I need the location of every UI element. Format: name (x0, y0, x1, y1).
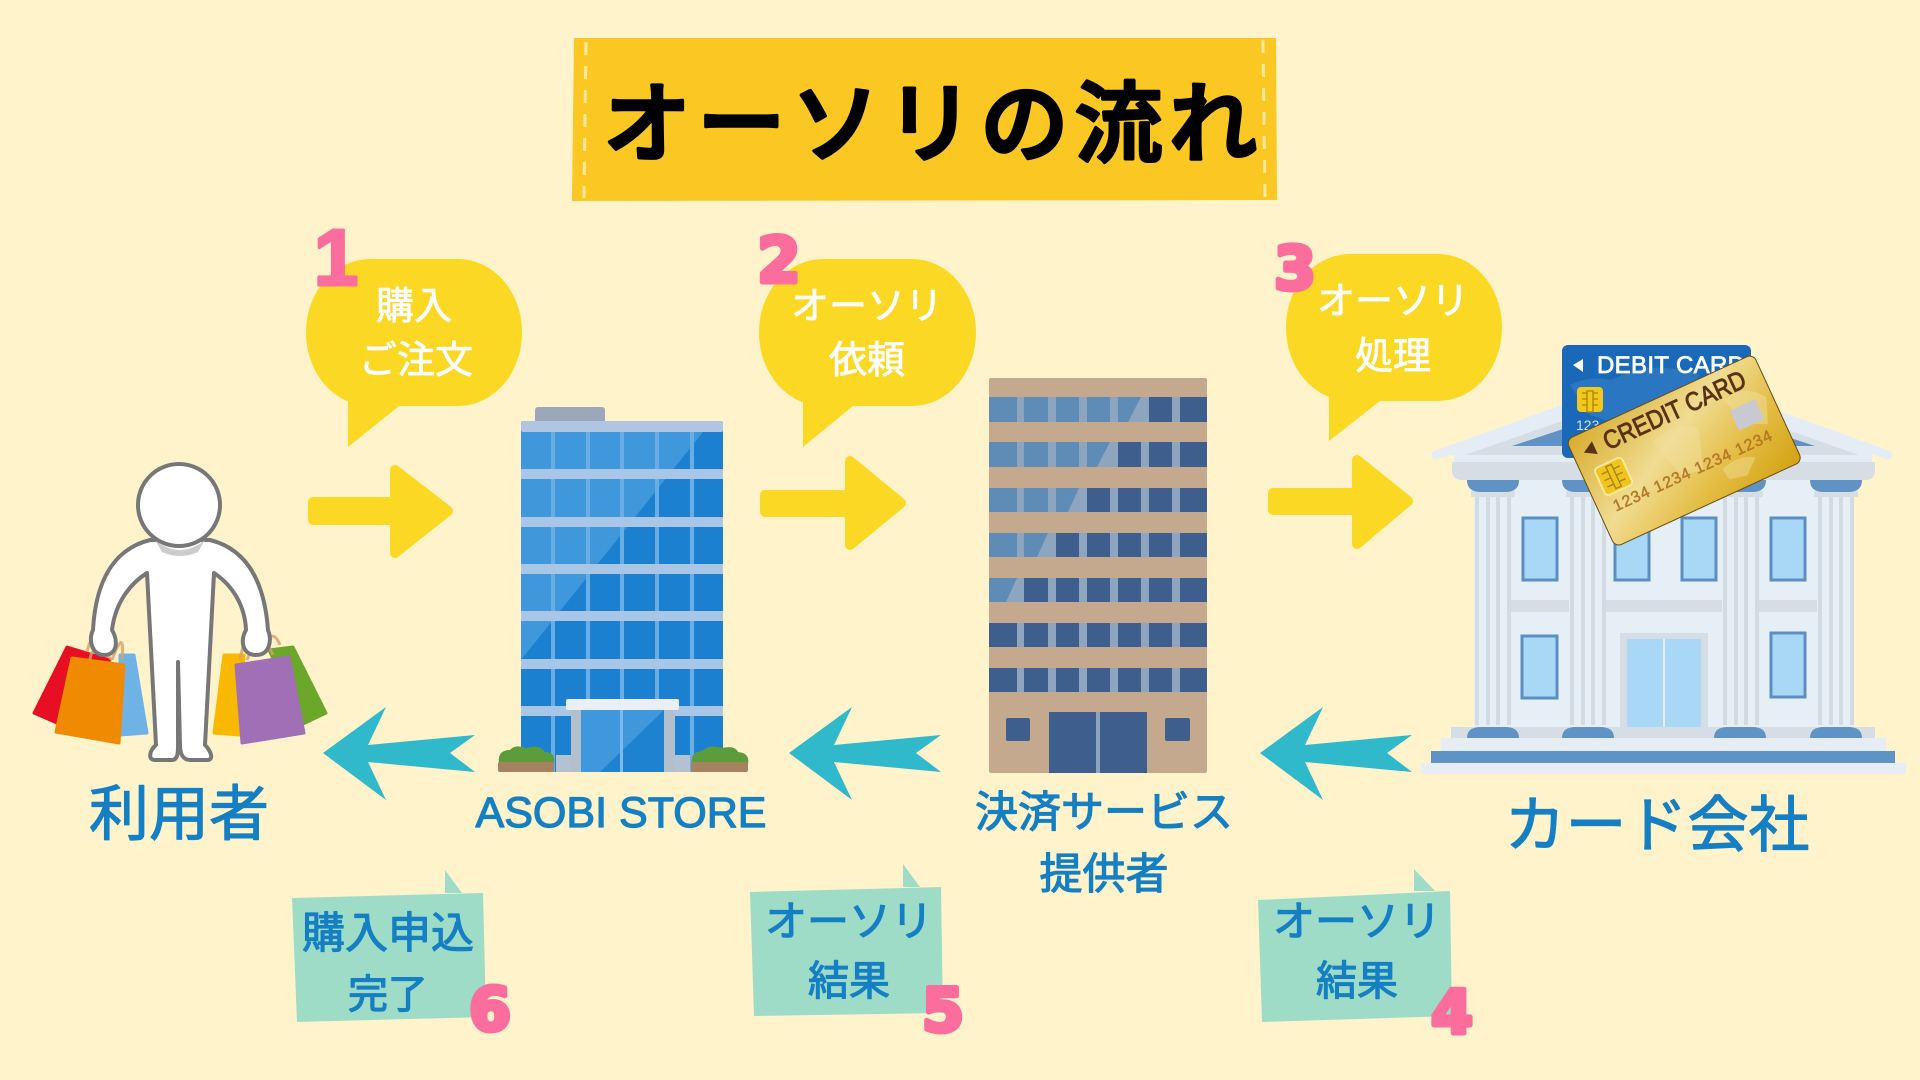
label: payment service provider: 決済サービス (975, 789, 1233, 837)
step number 5: 5 (922, 976, 964, 1046)
icon: card company bank building (1421, 374, 1906, 774)
sticky note: step 5 authorization result: オーソリ (765, 898, 933, 945)
step number 6: 6 (469, 975, 511, 1045)
icon: shopper with shopping bags (34, 464, 326, 760)
icon: gold credit card: 1234 1234 1234 1234 (1611, 428, 1775, 515)
sticky note: step 4 authorization result: オーソリ (1273, 898, 1441, 945)
label: card company: カード会社 (1504, 791, 1810, 859)
speech bubble: step 2 authorization request: 依頼 (829, 340, 905, 382)
label: ASOBI STORE: ASOBI STORE (476, 789, 766, 837)
arrow: result back to provider (1260, 707, 1412, 800)
sticky note: step 6 purchase complete (292, 870, 486, 1022)
icon: debit card (1562, 345, 1751, 458)
arrow: result back to user (323, 707, 475, 800)
arrow: step 2 (765, 461, 901, 545)
sticky note: step 6 purchase complete: 購入申込 (302, 910, 474, 958)
speech bubble: step 3 authorization processing: 処理 (1355, 336, 1431, 378)
sticky note: step 4 authorization result: 結果 (1316, 958, 1398, 1004)
icon: debit card: 123 (1576, 417, 1600, 433)
arrow: step 3 (1273, 460, 1408, 544)
sticky note: step 4 authorization result (1258, 869, 1452, 1022)
icon: ASOBI STORE blue office building (498, 407, 748, 772)
speech bubble: step 3 authorization processing: オーソリ (1317, 281, 1469, 323)
sticky note: step 5 authorization result: 結果 (808, 958, 890, 1004)
title banner (572, 38, 1277, 201)
arrow: result back to store (789, 707, 941, 800)
speech bubble: step 1 purchase order: 購入 (376, 286, 452, 328)
step number 3: 3 (1274, 234, 1316, 304)
speech bubble: step 2 authorization request (759, 259, 976, 447)
step number 4: 4 (1431, 978, 1473, 1048)
label: provider second line: 提供者 (1040, 851, 1168, 899)
step number 1: 1 (314, 213, 358, 302)
title text: オーソリの流れ (603, 75, 1257, 174)
speech bubble: step 3 authorization processing (1286, 254, 1502, 441)
sticky note: step 6 purchase complete: 完了 (348, 973, 428, 1017)
label: user: 利用者 (89, 781, 269, 848)
speech bubble: step 1 purchase order: ご注文 (359, 340, 473, 382)
icon: gold credit card (1566, 354, 1802, 547)
icon: gold credit card: CREDIT CARD (1598, 364, 1751, 456)
speech bubble: step 2 authorization request: オーソリ (791, 286, 943, 328)
speech bubble: step 1 purchase order (306, 259, 522, 447)
icon: debit card: DEBIT CARD (1597, 352, 1745, 379)
step number 2: 2 (757, 224, 801, 297)
arrow: step 1 (313, 470, 448, 553)
icon: payment provider tan office building (989, 378, 1207, 773)
sticky note: step 5 authorization result (750, 864, 943, 1016)
